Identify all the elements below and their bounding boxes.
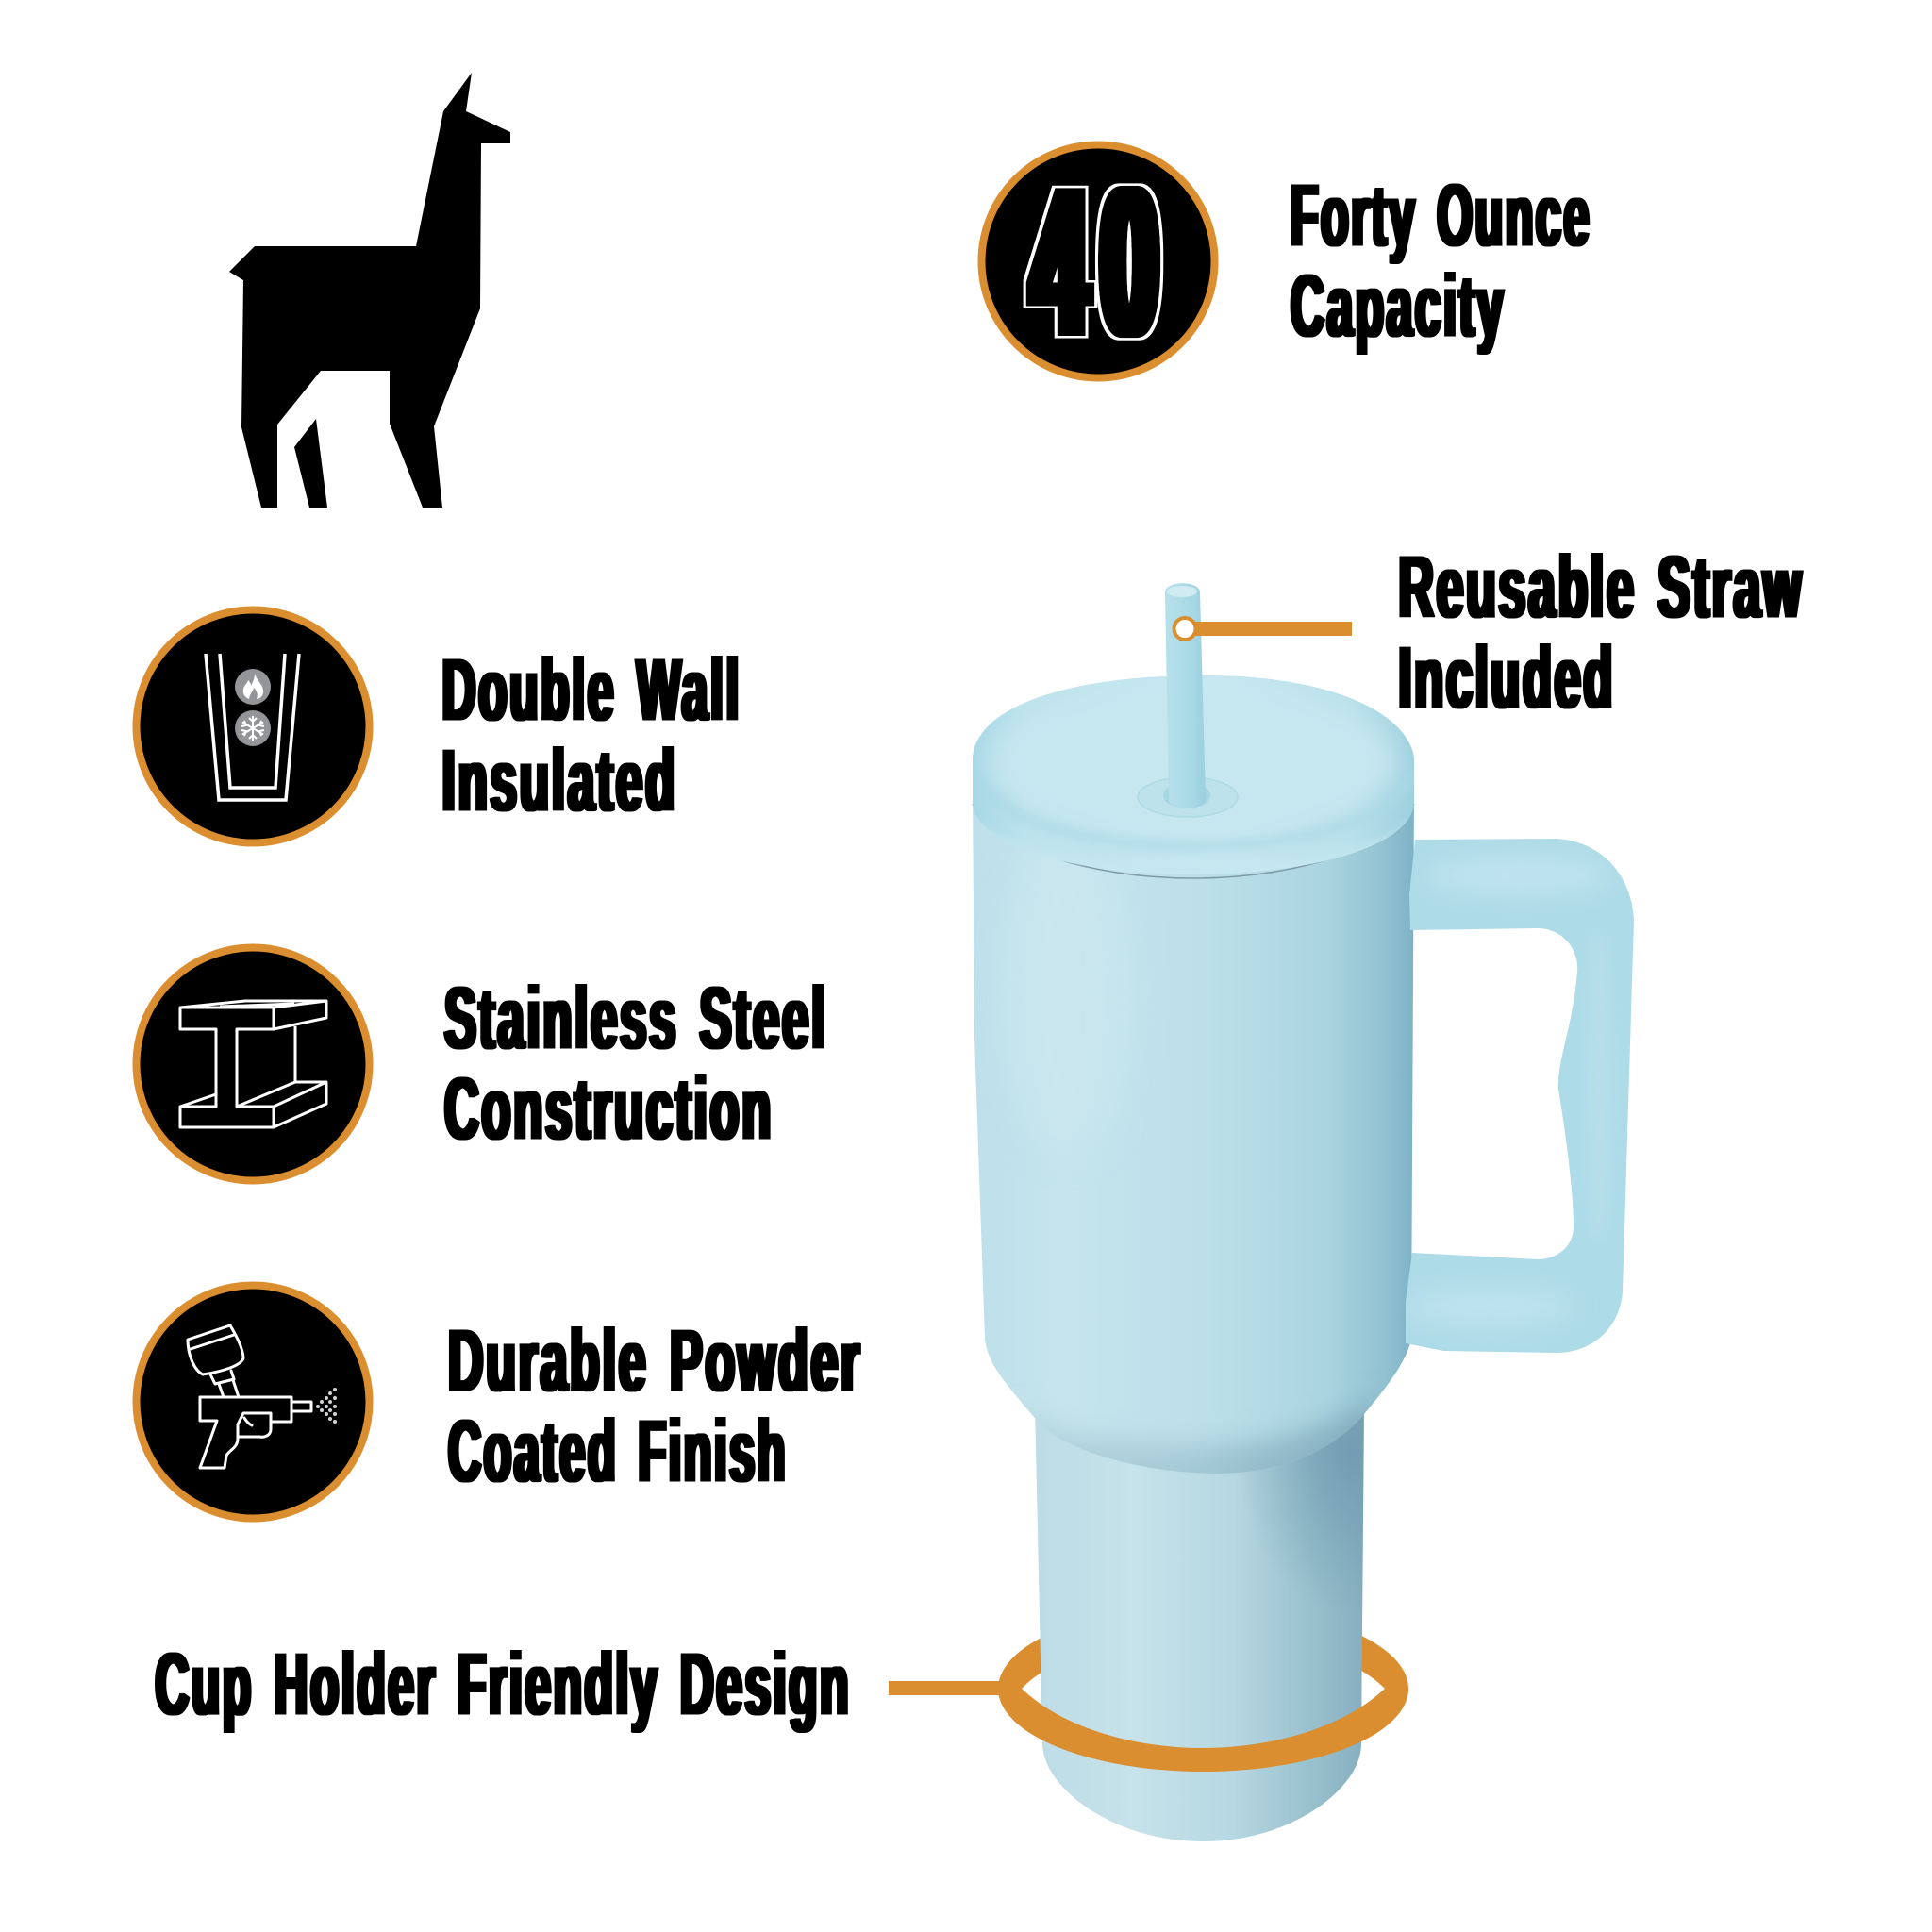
text: double wall insulated: Double Wall <box>441 641 741 739</box>
lid <box>973 675 1414 874</box>
text: durable powder coated finish <box>448 1311 862 1500</box>
callout ring: front half over tumbler with leader line <box>889 1681 1408 1772</box>
icon: llama silhouette logo <box>229 73 510 508</box>
icon: stainless steel I-beam badge <box>136 947 370 1181</box>
straw opening <box>1167 586 1197 597</box>
text: double wall insulated <box>441 641 741 829</box>
text: stainless steel construction: Stainless Steel <box>444 969 827 1067</box>
straw base ring <box>1138 777 1238 817</box>
text: cup holder friendly design: Cup Holder Friendly Design <box>155 1635 851 1733</box>
text: reusable straw included <box>1398 538 1804 726</box>
icon: double wall insulated badge <box>136 609 370 843</box>
lid shadow line <box>973 804 1414 878</box>
icon: powder coat spray gun badge <box>136 1285 370 1519</box>
text: forty ounce capacity <box>1291 166 1591 355</box>
text: reusable straw included: Included <box>1398 628 1615 726</box>
text: durable powder coated finish: Durable Powder <box>448 1311 862 1409</box>
text: forty ounce capacity: Forty Ounce <box>1291 166 1591 264</box>
tumbler product <box>967 583 1634 1849</box>
text: stainless steel construction <box>444 969 827 1158</box>
tumbler body <box>973 792 1414 1500</box>
straw hole <box>1163 782 1210 808</box>
text: double wall insulated: Insulated <box>441 731 677 829</box>
tumbler neck <box>1028 1396 1373 1849</box>
text: stainless steel construction: Construction <box>444 1059 774 1158</box>
callout ring: back half behind tumbler <box>998 1606 1408 1772</box>
text: durable powder coated finish: Coated Finish <box>448 1402 788 1500</box>
icon: 40 ounce badge: 40 <box>1032 144 1158 381</box>
callout: straw pointer <box>1174 618 1352 640</box>
handle <box>1406 839 1634 1353</box>
text: forty ounce capacity: Capacity <box>1291 257 1506 355</box>
straw <box>1165 583 1206 808</box>
icon: 40 ounce badge <box>981 144 1215 381</box>
